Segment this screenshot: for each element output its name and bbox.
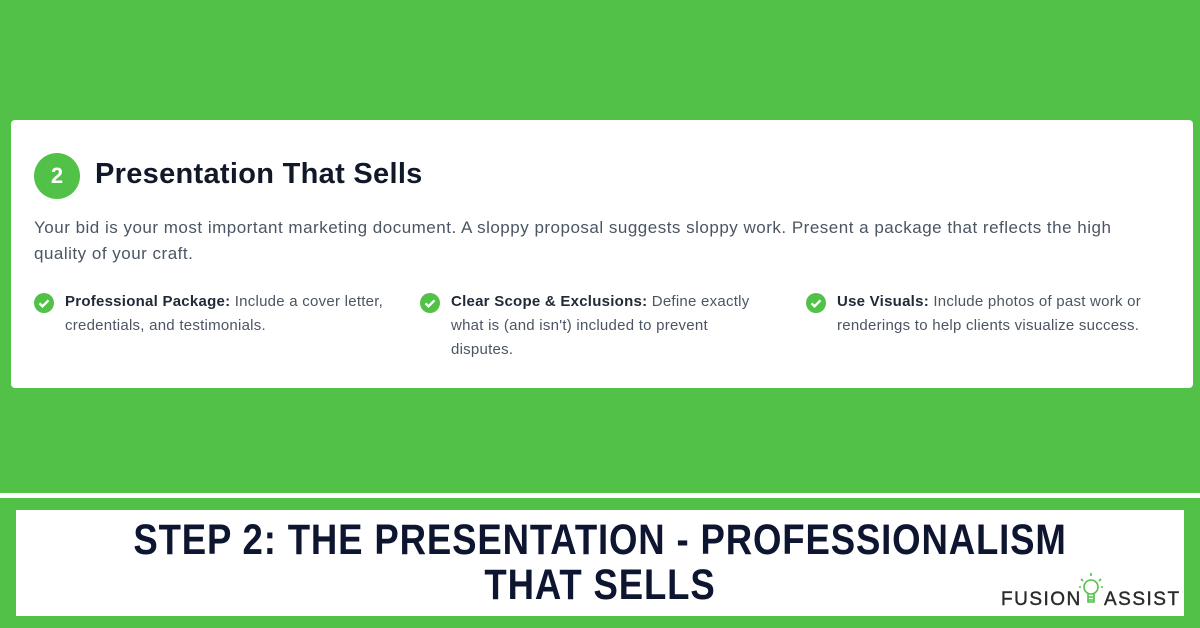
text block: intro: Your bid is your most important marketing document. A sloppy proposal suggests sloppy work. Present a package that reflects the high quality of your craft. [34,218,1111,263]
logo: fusion assist [1001,573,1181,610]
heading: Presentation That Sells [95,158,423,190]
bullet: clear scope: Clear Scope & Exclusions: Define exactly what is (and isn't) included to prevent disputes. [451,293,749,358]
title: STEP 2: THE PRESENTATION - PROFESSIONALISM [133,516,1067,564]
panel: bottom title box [16,510,1184,616]
logo: fusion assist: FUSION [1001,589,1082,610]
title: THAT SELLS [484,561,716,609]
icon: step number 2: 2 [51,163,63,188]
icon: step number 2 [34,153,80,199]
logo: fusion assist: ASSIST [1104,589,1181,610]
panel: presentation card [11,120,1193,388]
bullet: professional package: Professional Package: Include a cover letter, credentials, and testimonials. [65,293,383,334]
title [133,516,1067,609]
bullet: use visuals: Use Visuals: Include photos of past work or renderings to help clients visualize success. [837,293,1141,334]
